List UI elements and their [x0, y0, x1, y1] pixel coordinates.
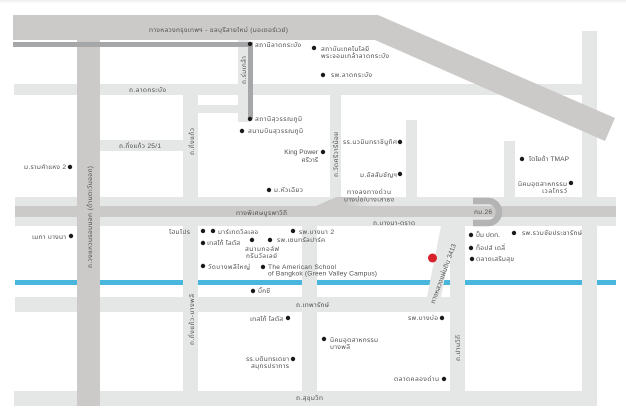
place: expressway exit: ทางลงทางด่วน — [347, 187, 391, 196]
road: Panwithi — [450, 226, 465, 391]
label: ring road: ถ.วงแหวนรอบนอก (ด้านตะวันออก) — [86, 166, 94, 268]
place: Welgrow — [518, 181, 573, 195]
road crossings over canal — [183, 280, 597, 285]
label: Lat Krabang road: ถ.ลาดกระบัง — [129, 86, 166, 94]
place: Welgrow: เวลโกรว์ — [542, 187, 567, 195]
place: KMITL — [312, 45, 389, 60]
road: Wat Sri Waree Noi — [330, 95, 341, 197]
place: Khlong Dan market: ตลาดคลองด่าน — [394, 374, 439, 383]
road: stub near Toyota — [504, 141, 515, 197]
road: Lat Krabang — [14, 84, 597, 95]
place: Suvarnabhumi station — [248, 115, 302, 124]
place: expressway exit — [344, 187, 394, 204]
place: Bang Phli Industrial Estate: นิคมอุตสาหกรรม — [330, 337, 378, 345]
location marker — [428, 254, 437, 262]
place: Bodindecha school — [246, 356, 295, 371]
place: Tesco Lotus: เทสโก้ โลตัส — [207, 239, 240, 247]
expressway ramp — [316, 197, 372, 206]
place: Tops Daily: ท็อปส์ เดลี่ — [476, 243, 505, 252]
road: Bang Na-Trat — [15, 197, 616, 226]
road: Romklao link — [198, 105, 249, 113]
place: expressway exit: บางบ่อ/บางเสาธง — [344, 194, 394, 204]
place: HomePro: โฮมโปร — [169, 228, 190, 236]
label: km 26: กม.26 — [474, 209, 492, 216]
place: Bang Phli Industrial Estate — [322, 337, 378, 351]
road: Highway 3413 — [427, 226, 455, 297]
label: Wat Sri Waree Noi: ถ.วัดศรีวารีน้อย — [332, 132, 340, 177]
label: Romklao: ถ.ร่มเกล้า — [239, 56, 248, 84]
place: Suvarnabhumi airport: สนามบินสุวรรณภูมิ — [248, 128, 303, 136]
label: Bang Na-Trat: ถ.บางนา-ตราด — [373, 220, 415, 227]
place: Market Village: มาร์เกตวิลเลจ — [218, 228, 258, 236]
place: Mega Bangna: เมกา บางนา — [32, 234, 66, 241]
label: Kingkaew: ถ.กิ่งแก้ว — [187, 128, 196, 155]
place: Tesco Lotus south: เทสโก้ โลตัส — [250, 315, 283, 323]
place: Lat Krabang hospital — [321, 71, 372, 79]
place: Nawamin school: รร.นวมินทราชินูทิศ — [343, 139, 397, 146]
label: Kingkaew 25/1: ถ.กิ่งแก้ว 25/1 — [119, 141, 161, 150]
road: Theparak — [15, 297, 450, 312]
place: Green Valley golf: สนามกอล์ฟ — [245, 245, 280, 253]
place: KMITL: พระจอมเกล้าลาดกระบัง — [321, 52, 389, 60]
place: PTT station: ปั๊ม ปตท. — [476, 230, 500, 239]
ring road — [77, 40, 100, 406]
road: Kingkaew 25/1 — [100, 140, 183, 151]
label: Highway 3413: ทางหลวงแผ่นดิน 3413 — [428, 242, 458, 305]
place: Bodindecha school: สมุทรปราการ — [251, 363, 289, 371]
place: American School: The American School — [268, 264, 337, 271]
place: King Power: ศรีวารี — [302, 156, 318, 164]
places — [24, 41, 582, 383]
expressway: Burapha Withi — [15, 206, 616, 217]
place: ABAC: ม.อัสสัมชัญฯ — [360, 171, 397, 179]
place: Ruamchai hospital: รพ.รวมชัยประชารักษ์ — [522, 229, 582, 237]
road: junction — [445, 226, 450, 233]
place: Lat Krabang hospital: รพ.ลาดกระบัง — [331, 71, 372, 79]
road: far east vertical — [582, 31, 597, 406]
place: Suvarnabhumi station: สถานีสุวรรณภูมิ — [255, 115, 302, 124]
place: American School — [261, 264, 377, 278]
place: Huachiew: ม.หัวเฉียว — [274, 186, 303, 194]
place: Big C: บิ๊กซี — [258, 286, 270, 295]
place: Bangna 2 hospital: รพ.บางนา 2 — [299, 229, 334, 236]
place: American School: of Bangkok (Green Valley Campus) — [268, 270, 377, 278]
place: Wat Bang Phli Yai — [201, 262, 250, 271]
place: Welgrow: นิคมอุตสาหกรรม — [518, 181, 567, 189]
place: Bodindecha school: รร.บดินทรเดชา — [246, 356, 289, 363]
place: Central Park hospital: รพ.เซนทรัลปาร์ค — [277, 236, 325, 244]
place: Lat Krabang station: สถานีลาดกระบัง — [255, 41, 301, 49]
place: King Power — [284, 149, 325, 164]
place: Green Valley golf — [245, 238, 280, 260]
place: Bang Phli Industrial Estate: บางพลี — [330, 343, 350, 351]
road: Romklao — [238, 40, 249, 122]
label: Panwithi: ถ.ปานวิถี — [454, 335, 462, 361]
road: Sukhumvit — [14, 391, 597, 406]
place: King Power: King Power — [284, 149, 319, 156]
label: Burapha Withi: ทางพิเศษบูรพาวิถี — [236, 209, 287, 217]
U-turn at km 26 — [473, 201, 499, 223]
road: lower vertical — [302, 226, 317, 391]
road: stub north of Bang Na — [406, 120, 417, 197]
label: motorway: ทางหลวงกรุงเทพฯ - ชลบุรีสายใหม่ (มอเตอร์เวย์) — [149, 25, 288, 35]
river: blue canal — [15, 280, 616, 285]
place: Green Valley golf: กรีนวัลเลย์ — [246, 252, 277, 260]
place: Toyota TMAP: โตโยต้า TMAP — [529, 155, 570, 163]
place: Big C — [251, 286, 270, 295]
place: Soem Suk market: ตลาดเสริมสุข — [476, 256, 514, 264]
motorway: Bangkok-Chonburi — [13, 15, 615, 141]
label: Kingkaew-Bang Phli: ถ.กิ่งแก้ว-บางพลี — [187, 294, 196, 345]
place: Bang Bo hospital: รพ.บางบ่อ — [408, 313, 438, 322]
place: Wat Bang Phli Yai: วัดบางพลีใหญ่ — [208, 262, 250, 271]
road: Kingkaew — [183, 95, 198, 391]
label: Sukhumvit: ถ.สุขุมวิท — [296, 395, 323, 403]
place: HomePro — [169, 228, 205, 236]
place: Tops Daily — [469, 243, 505, 252]
rail link horizontal — [13, 42, 253, 47]
rail link vertical — [248, 42, 253, 119]
place: KMITL: สถาบันเทคโนโลยี — [321, 45, 369, 53]
label: Theparak: ถ.เทพารักษ์ — [296, 301, 329, 309]
place: PTT station — [469, 230, 500, 239]
place: Ramkhamhaeng 2: ม.รามคำแหง 2 — [24, 163, 66, 171]
road labels — [86, 25, 492, 403]
place: Khlong Dan market — [394, 374, 446, 383]
place: Bang Bo hospital — [408, 313, 444, 322]
